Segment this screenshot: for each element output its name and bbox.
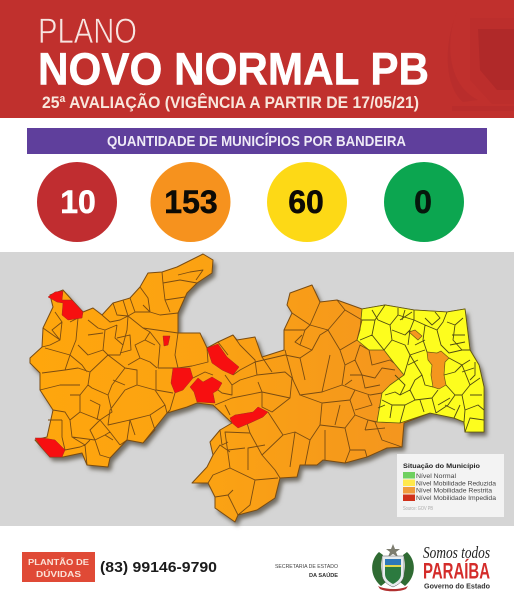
title: novo normal pb: NOVO NORMAL PB [38,44,429,94]
title: plano: PLANO [38,12,137,51]
map panel background [0,252,514,526]
legend item: normal: Nível Normal [416,474,456,480]
phone number: (83) 99146-9790 [100,560,217,576]
legend title: Situação do Município [403,463,480,470]
orange count: 153 [164,184,218,220]
red municipalities [35,291,268,457]
helpline badge [22,552,95,582]
green count [384,162,464,242]
subtitle: 25ª AVALIAÇÃO (VIGÊNCIA A PARTIR DE 17/05/21) [42,92,419,112]
red count: 10 [60,184,96,220]
map of paraiba [30,254,487,526]
icon: state coat of arms [372,544,414,591]
legend item: impedida: Nível Mobilidade Impedida [416,496,497,502]
header banner [0,0,514,118]
slogan logo: Governo do Estado [424,582,490,590]
health secretariat: DA SAÚDE [309,572,339,579]
orange count [150,162,230,242]
helpline badge: PLANTÃO DE [28,558,90,567]
yellow municipalities [357,305,484,432]
legend item: reduzida: Nível Mobilidade Reduzida [416,482,497,488]
slogan logo: Somos todos [423,543,490,562]
helpline badge: DÚVIDAS [36,570,82,579]
legend item: restrita: Nível Mobilidade Restrita [416,488,493,494]
health secretariat [275,564,339,579]
health secretariat: SECRETARIA DE ESTADO [275,564,338,570]
orange enclave in yellow area [409,330,449,389]
red count [37,162,117,242]
legend [397,454,504,517]
flag counts [37,162,464,242]
map shadow [33,258,487,526]
municipal borders: west and middle [40,270,402,515]
yellow count: 60 [288,184,324,220]
slogan logo [423,543,490,590]
purple heading bar [27,128,487,154]
yellow count [267,162,347,242]
purple heading bar: QUANTIDADE DE MUNICÍPIOS POR BANDEIRA [107,133,406,150]
footer [22,543,490,591]
municipal borders: east [360,305,484,432]
crest watermark [448,12,514,111]
green count: 0 [414,184,432,220]
legend source: Source: GOV PB [403,506,434,512]
orange municipalities [30,254,484,522]
